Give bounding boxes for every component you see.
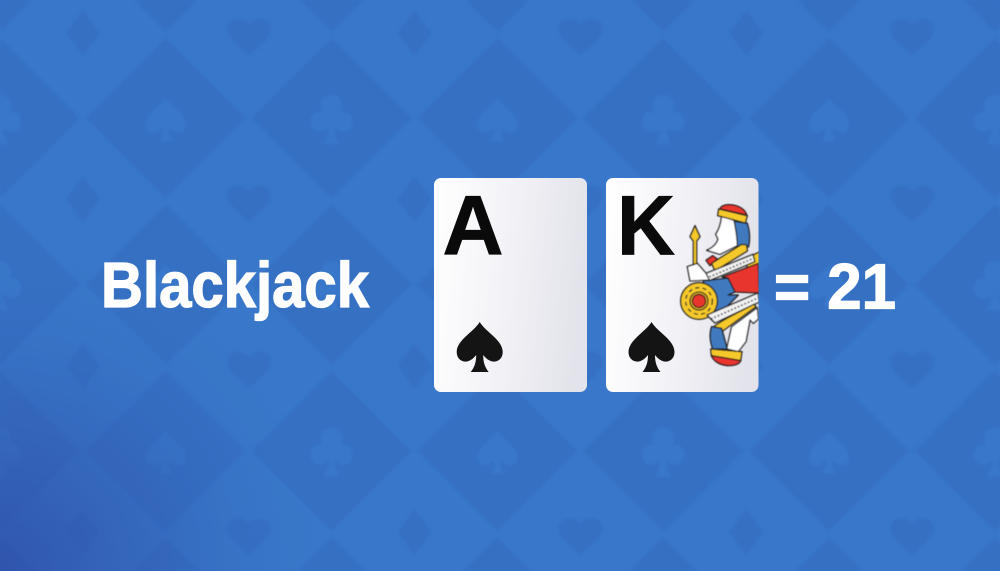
blue body bbox=[700, 278, 738, 321]
hair top bbox=[733, 221, 750, 249]
lower sash bbox=[713, 304, 756, 333]
red shoulder bbox=[706, 256, 717, 266]
illustration: king figure bbox=[679, 203, 758, 368]
upper sash bbox=[712, 244, 747, 271]
lower robe white bbox=[727, 308, 758, 352]
background: blue suit pattern bbox=[0, 281, 270, 571]
shield bbox=[681, 283, 717, 319]
lower dotted band bbox=[707, 293, 759, 323]
playing card: king of spades bbox=[606, 178, 758, 392]
heading: Blackjack: Blackjack bbox=[101, 249, 369, 321]
crown bbox=[720, 205, 747, 215]
face and beard bbox=[707, 216, 737, 254]
sceptre bbox=[690, 226, 700, 268]
infographic bbox=[0, 178, 895, 571]
card rank: A: A bbox=[442, 178, 504, 272]
right shield bbox=[746, 251, 758, 268]
lower hair bbox=[710, 327, 727, 349]
equation: = 21: = 21 bbox=[774, 250, 896, 322]
lower crown bbox=[711, 349, 742, 361]
icon: spade bbox=[628, 322, 674, 372]
red body bbox=[722, 263, 759, 293]
hand bbox=[687, 263, 709, 281]
icon: spade bbox=[457, 322, 503, 372]
upper dotted band bbox=[706, 254, 755, 281]
card rank: K: K bbox=[617, 178, 675, 272]
playing card: ace of spades bbox=[434, 178, 587, 392]
